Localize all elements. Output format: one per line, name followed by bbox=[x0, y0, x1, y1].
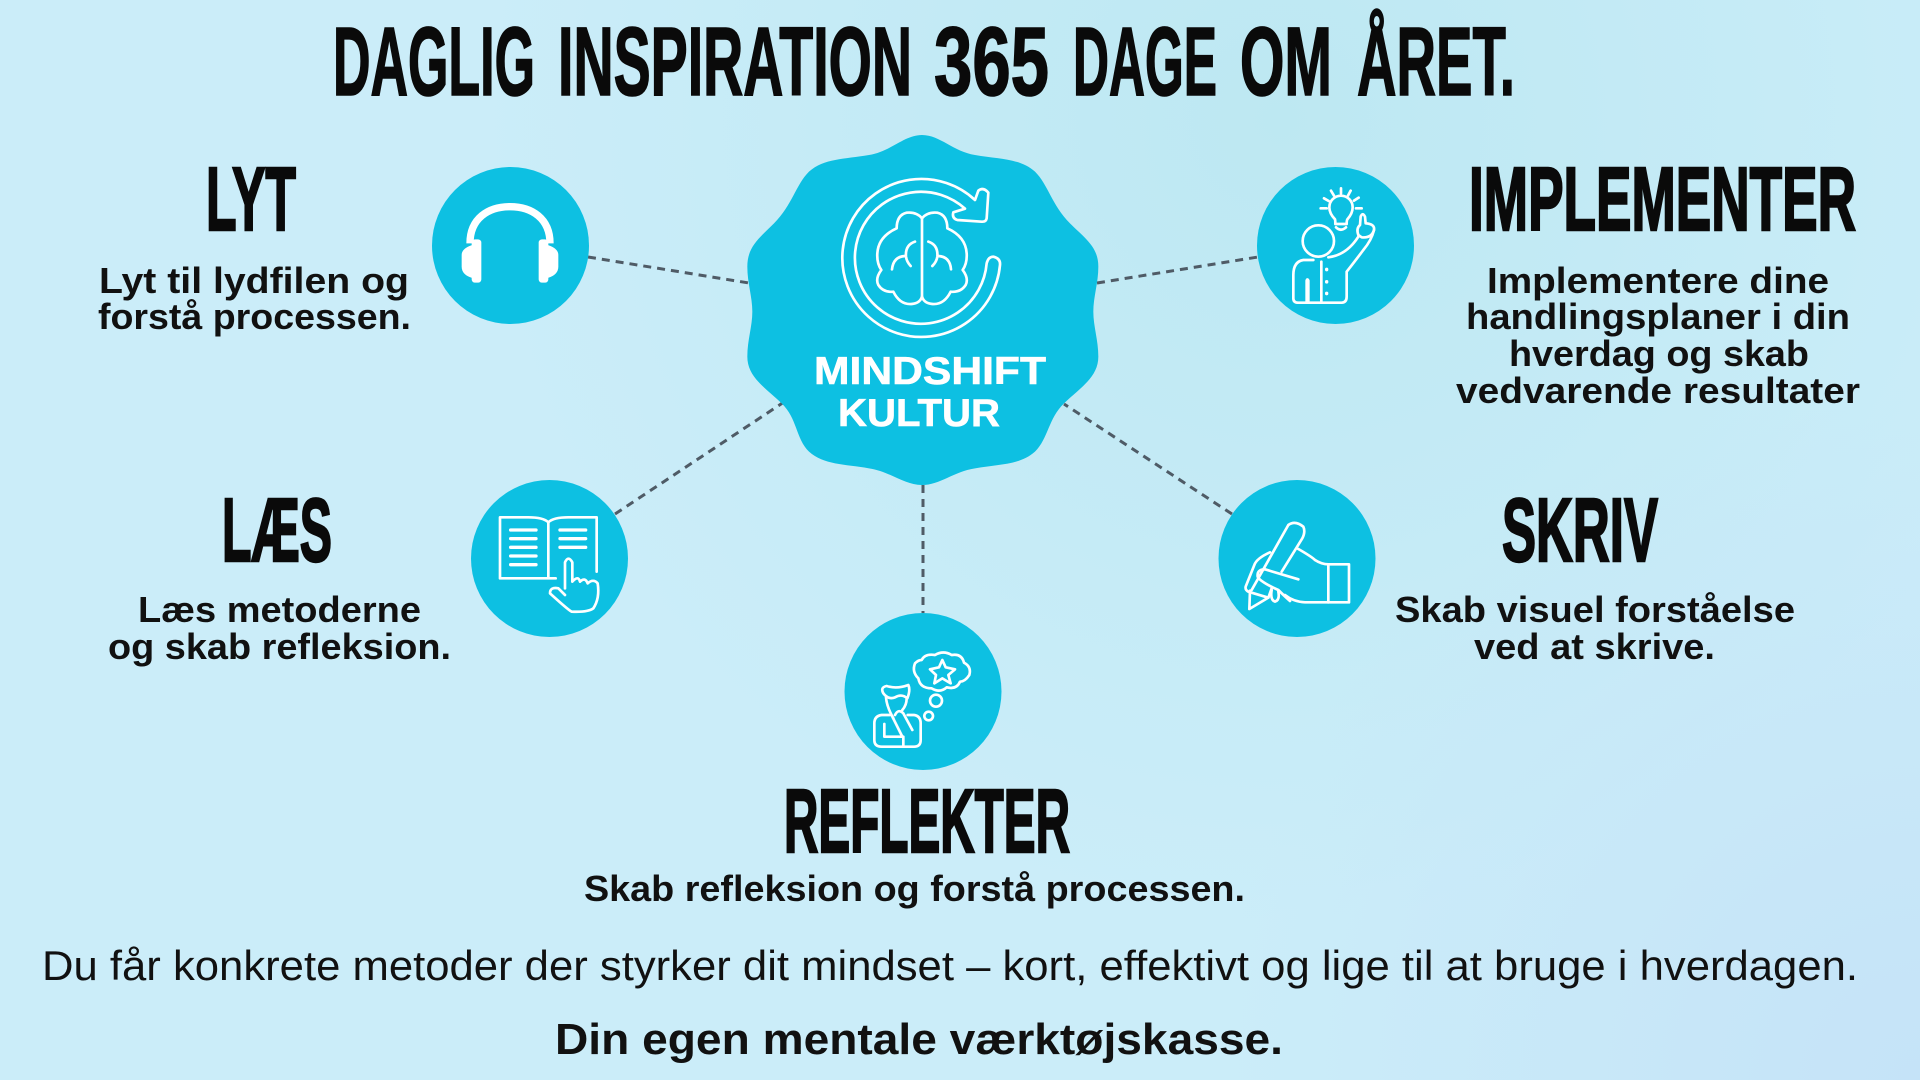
title: INSPIRATION bbox=[558, 7, 912, 116]
circle bbox=[844, 613, 1002, 770]
title: ÅRET. bbox=[1357, 7, 1515, 116]
heading: LYT bbox=[206, 150, 296, 250]
description bbox=[1456, 260, 1860, 411]
badge label bbox=[814, 350, 1046, 435]
badge shape bbox=[747, 135, 1098, 485]
description: Lyt til lydfilen og bbox=[99, 260, 409, 301]
description: vedvarende resultater bbox=[1456, 370, 1860, 411]
node: Implementer bbox=[1257, 150, 1860, 411]
closing sentence: Du får konkrete metoder der styrker dit mindset – kort, effektivt og lige til at bruge i hverdagen. bbox=[42, 942, 1858, 989]
circle bbox=[471, 480, 628, 637]
node: Reflekter bbox=[584, 613, 1245, 909]
icon: open book with pointing hand bbox=[500, 517, 598, 612]
icon: person with thought cloud bbox=[874, 652, 970, 747]
description bbox=[1395, 589, 1795, 667]
title: DAGLIG bbox=[333, 7, 535, 116]
icon: headphones bbox=[462, 207, 558, 283]
node: Skriv bbox=[1218, 480, 1795, 667]
description: og skab refleksion. bbox=[108, 626, 451, 667]
dashed connector lines bbox=[588, 257, 1258, 613]
title: DAGE bbox=[1073, 7, 1217, 116]
circle bbox=[1257, 167, 1414, 324]
badge label: KULTUR bbox=[838, 392, 1000, 435]
icon: hand writing with pen bbox=[1246, 523, 1349, 609]
circle bbox=[1218, 480, 1376, 637]
description bbox=[98, 260, 411, 337]
title bbox=[333, 7, 1515, 116]
title: 365 bbox=[934, 7, 1049, 116]
badge label: MINDSHIFT bbox=[814, 350, 1046, 393]
description bbox=[108, 589, 451, 667]
description: ved at skrive. bbox=[1474, 626, 1715, 667]
node: Læs bbox=[108, 480, 628, 667]
description: Skab refleksion og forstå processen. bbox=[584, 868, 1245, 909]
description: hverdag og skab bbox=[1509, 333, 1809, 374]
closing tagline: Din egen mentale værktøjskasse. bbox=[555, 1015, 1283, 1064]
title: OM bbox=[1240, 7, 1332, 116]
description: forstå processen. bbox=[98, 296, 411, 337]
circle bbox=[432, 167, 589, 324]
heading: LÆS bbox=[222, 481, 332, 581]
icon: person with light bulb bbox=[1293, 188, 1374, 303]
description: handlingsplaner i din bbox=[1466, 296, 1850, 337]
icon: brain with circular arrow bbox=[842, 179, 1000, 337]
central badge: Mindshift Kultur bbox=[747, 135, 1098, 485]
heading: SKRIV bbox=[1502, 481, 1658, 581]
description: Læs metoderne bbox=[138, 589, 421, 630]
heading: REFLEKTER bbox=[784, 772, 1070, 872]
description: Implementere dine bbox=[1487, 260, 1829, 301]
description: Skab visuel forståelse bbox=[1395, 589, 1795, 630]
node: Lyt bbox=[98, 150, 589, 337]
